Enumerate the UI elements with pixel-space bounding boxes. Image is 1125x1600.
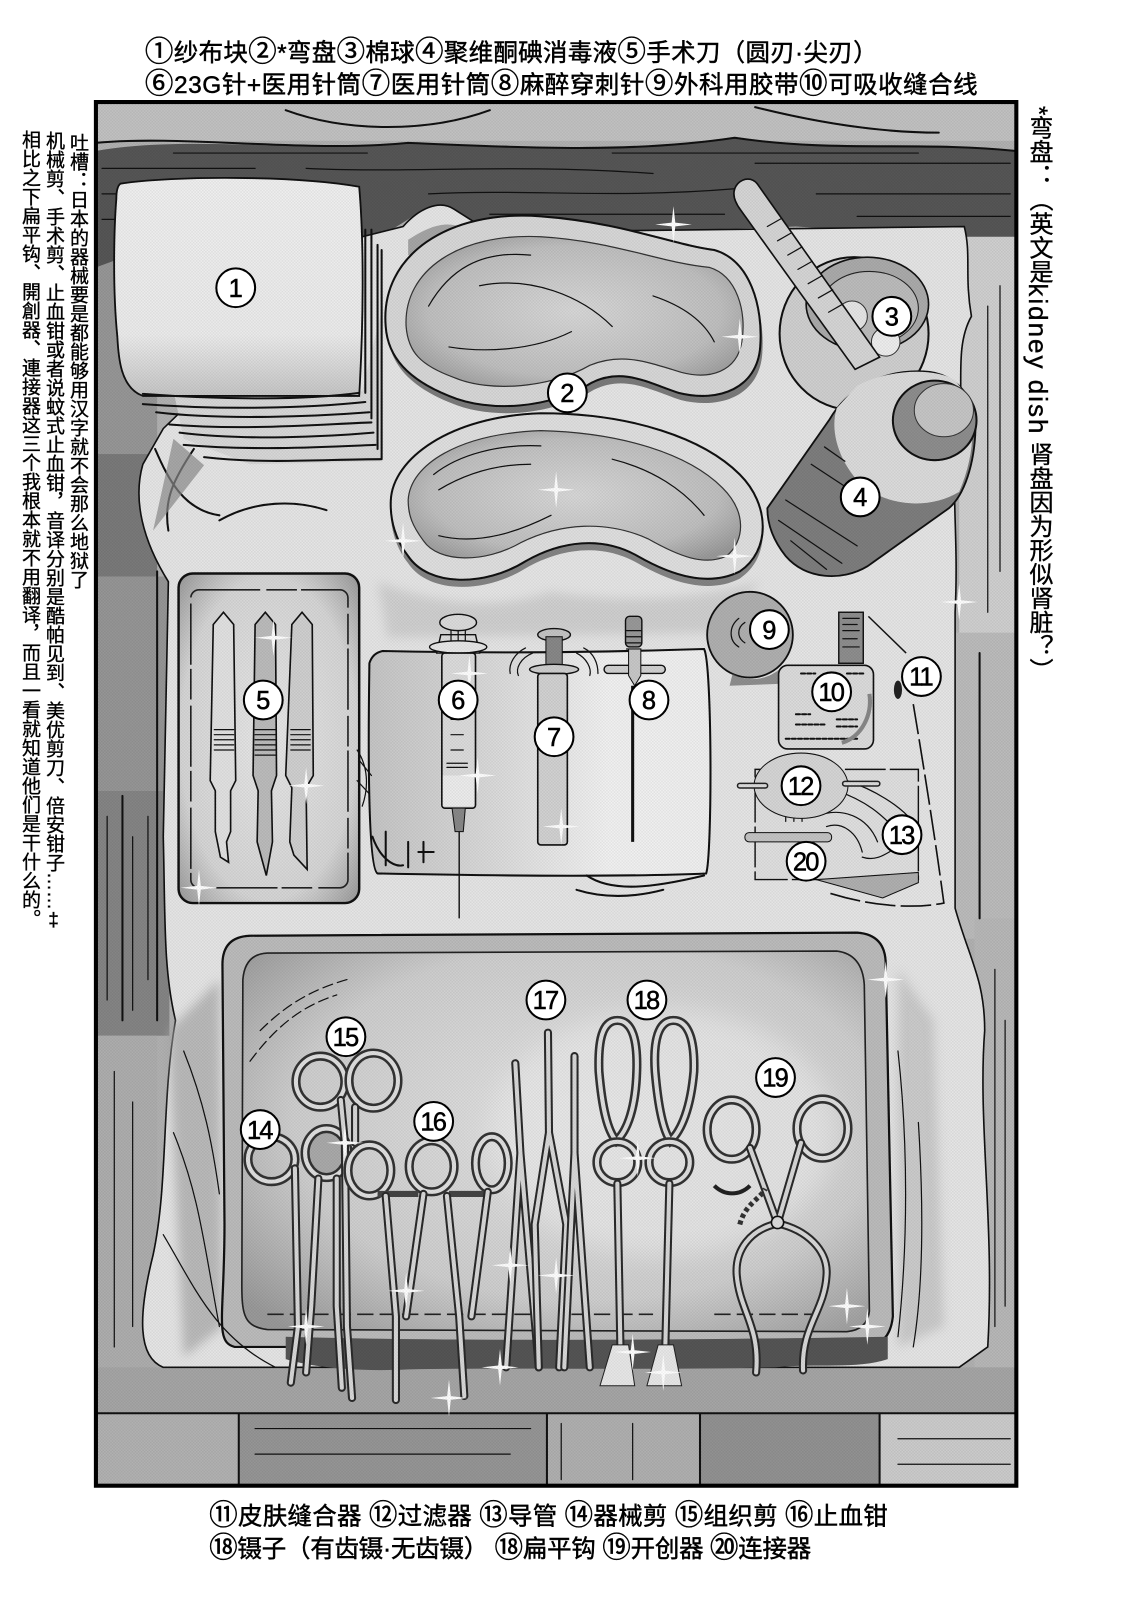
bottom caption: items 11 to 20: [209, 1499, 888, 1564]
scalpel three: [286, 612, 313, 869]
scalpel two: [253, 612, 277, 876]
item 4: iodine bottle: [767, 371, 977, 576]
cloth: [139, 205, 990, 1367]
right footnote: kidney dish: *弯盘：（英文是 kidney dish 肾盘因为形似肾脏？）: [1023, 106, 1053, 682]
side note: column one: 吐槽：日本的器械要是都能够用汉字就不会那么地狱了: [67, 133, 88, 589]
bottom caption: items 11 to 20: ⑱镊子（有齿镊·无齿镊） ⑱扁平钩 ⑲开创器 ⑳连接器: [209, 1532, 811, 1564]
item 6: syringe with needle: [430, 614, 487, 918]
number badges: 18: [634, 987, 660, 1015]
towel under syringes: [357, 649, 710, 896]
item 14: instrument scissors: [248, 1129, 348, 1388]
number badges: 15: [333, 1024, 359, 1052]
panel: surgical instruments table illustration: [96, 102, 1016, 1486]
sparkles: [181, 206, 978, 1416]
item 8: anesthesia needle: [604, 616, 665, 842]
item 3: cotton balls cup with forceps: [734, 179, 929, 410]
number badges: 1: [229, 275, 243, 303]
number badges: 6: [451, 687, 465, 715]
item 5: scalpel tray: [179, 573, 359, 903]
item 9: tape roll: [707, 592, 793, 686]
items 12 13 20: filter, catheter, connector package: [740, 753, 918, 898]
number badges: 20: [793, 848, 819, 876]
halftone screen: [96, 102, 1016, 1486]
large instrument tray: [163, 933, 922, 1370]
number badges: 19: [762, 1065, 789, 1093]
scalpel one: [210, 612, 236, 862]
number badges: 5: [256, 687, 270, 715]
number badges: 3: [885, 304, 899, 332]
wooden background: [96, 102, 1016, 1486]
item 1: gauze stack: [114, 178, 383, 464]
top caption: items 1 to 10: ①纱布块②*弯盘③棉球④聚维酮碘消毒液⑤手术刀（圆刃·尖刃）: [145, 36, 878, 68]
number badges: 16: [420, 1109, 447, 1137]
item 10: suture packet and item 11 stapler: [779, 612, 944, 906]
number badges: 9: [762, 617, 776, 645]
number badges: 17: [533, 987, 559, 1015]
item 15: tissue scissors: [296, 1053, 398, 1398]
item 7: syringe: [510, 629, 598, 845]
number badges: 13: [889, 822, 915, 850]
number badges: 14: [247, 1117, 273, 1145]
dark wood band behind table: [96, 138, 1016, 267]
number badges: 11: [909, 664, 934, 692]
bottom caption: items 11 to 20: ⑪皮肤缝合器 ⑫过滤器 ⑬导管 ⑭器械剪 ⑮组织剪 ⑯止血钳: [209, 1499, 888, 1531]
number badges: 2: [560, 380, 574, 408]
side note: column three: 相比之下扁平钩、開創器、連接器这三个我根本就不用翻译，而且一看就知道他们是干什么的。: [19, 130, 40, 928]
number badges: 8: [642, 687, 656, 715]
item 16: hemostatic forceps: [348, 1137, 508, 1400]
top caption: items 1 to 10: [145, 36, 978, 100]
number badges: 4: [853, 484, 867, 512]
number badges: [216, 268, 941, 1149]
top caption: items 1 to 10: ⑥23G针+医用针筒⑦医用针筒⑧麻醉穿刺针⑨外科用胶带⑩可吸收缝合线: [145, 68, 978, 100]
side note: column two: 机械剪、手术剪、止血钳或者说蚊式止血钳，音译分别是酷帕见到、美优剪刀、倍安钳子……‡: [43, 131, 64, 931]
item 17: tweezers: [506, 1033, 590, 1367]
item 2: kidney dishes: [385, 216, 763, 587]
item 18: flat retractors: [597, 1020, 694, 1386]
number badges: 7: [547, 724, 561, 752]
panel border: [96, 102, 1016, 1486]
cloth fold shading: [168, 582, 944, 1357]
item 19: wound retractor: [707, 1099, 848, 1372]
number badges: 12: [788, 773, 814, 801]
number badges: 10: [818, 679, 845, 707]
